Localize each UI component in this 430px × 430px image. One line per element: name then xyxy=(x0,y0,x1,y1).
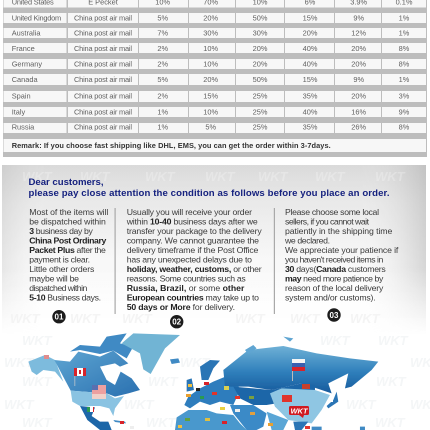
row: United States xyxy=(12,0,413,6)
row: Australia: 30% xyxy=(203,28,219,38)
WKT logo pin: WKT xyxy=(290,406,309,415)
text column 2 xyxy=(126,207,262,312)
Caribbean xyxy=(113,420,126,423)
text column 3: sellers, if you cannot wait xyxy=(285,216,370,226)
panel watermarks: WKT xyxy=(70,311,101,326)
text column 2: has any unexpected delays due to xyxy=(127,254,252,264)
text column 2: Russia, Brazil, or some other xyxy=(127,283,245,293)
row: Germany: 8% xyxy=(399,60,410,68)
row: Australia xyxy=(12,28,410,38)
row: Canada: 5% xyxy=(157,75,168,84)
row: Germany: China post air mail xyxy=(74,60,132,68)
text column 3: we declared. xyxy=(284,236,330,246)
row: Italy xyxy=(12,108,410,116)
badge 03: 03 xyxy=(330,311,339,320)
map watermarks: WKT xyxy=(124,397,155,412)
Greenland xyxy=(122,333,180,374)
panel watermarks: WKT xyxy=(375,169,406,184)
row: France: 20% xyxy=(351,44,367,53)
row: Australia: Australia xyxy=(12,28,41,38)
row: Spain: 25% xyxy=(253,92,268,100)
divider xyxy=(114,208,116,314)
map watermarks: WKT xyxy=(375,415,406,430)
map watermarks: WKT xyxy=(146,415,177,430)
text column 1: be dispatched within xyxy=(29,216,106,226)
panel watermarks xyxy=(10,169,406,326)
row: Canada: 15% xyxy=(303,75,318,84)
text column 1: China Post Ordinary xyxy=(29,236,106,246)
row: Australia: 7% xyxy=(157,28,168,38)
Middle East xyxy=(230,405,267,430)
text column 2: within 10-40 business days after we xyxy=(126,216,258,226)
row: Australia: 20% xyxy=(303,28,318,38)
Mexico and Central America xyxy=(80,406,112,430)
row: Russia: 8% xyxy=(399,122,410,132)
badge 03 xyxy=(327,308,341,322)
Alaska xyxy=(28,355,63,382)
text column 1 xyxy=(29,207,108,302)
panel watermarks: WKT xyxy=(10,311,41,326)
row: Italy: 1% xyxy=(157,108,168,116)
flag: Mexico xyxy=(87,407,94,412)
badge 01 xyxy=(52,310,66,323)
text column 3: may need more patience by xyxy=(285,274,384,284)
Scandinavia xyxy=(200,360,220,380)
heading xyxy=(28,177,390,199)
row: Canada: Canada xyxy=(12,75,38,84)
Central Asia and Mongolia xyxy=(233,383,315,405)
panel: customer notice xyxy=(2,165,426,340)
row: Canada: China post air mail xyxy=(74,75,132,84)
text column 3: Please choose some local xyxy=(285,207,379,217)
China xyxy=(270,388,330,423)
text column 2: transfer your package to the delivery xyxy=(127,226,262,236)
heading: please pay close attention the condition as follows before you place an order. xyxy=(28,188,390,199)
row: France: 40% xyxy=(303,44,318,53)
row: Russia: Russia xyxy=(12,122,35,132)
text column 2: European countries may take up to xyxy=(127,292,259,302)
row: France: China post air mail xyxy=(74,44,132,53)
text column 1: 3 business day by xyxy=(29,226,93,236)
row: France: 8% xyxy=(399,44,410,53)
map watermarks: WKT xyxy=(180,355,211,370)
map watermarks: WKT xyxy=(346,397,377,412)
continents xyxy=(28,333,378,430)
row: Germany xyxy=(12,60,410,68)
row: Italy: 25% xyxy=(253,108,268,116)
row: Italy: China post air mail xyxy=(74,108,132,116)
badge 02 xyxy=(170,315,183,328)
text column 1: 5-10 Business days. xyxy=(29,292,101,302)
row: Spain: 3% xyxy=(399,92,410,100)
map watermarks: WKT xyxy=(148,374,179,389)
text column 1: Little other orders xyxy=(29,264,95,274)
table row cells xyxy=(4,0,426,152)
text column 1: dispatched within xyxy=(29,283,87,293)
map watermarks: WKT xyxy=(378,333,409,348)
shipping table xyxy=(3,0,427,157)
map watermarks: WKT xyxy=(376,374,407,389)
row: United Kingdom: 9% xyxy=(353,14,364,22)
row: Italy: 10% xyxy=(203,108,219,116)
text column 2: holiday, weather, customs, or other xyxy=(127,264,262,274)
panel watermarks: WKT xyxy=(235,311,266,326)
map watermarks xyxy=(4,333,430,430)
Arctic archipelago xyxy=(245,337,293,354)
panel watermarks: WKT xyxy=(205,169,236,184)
row: United Kingdom: 1% xyxy=(399,14,410,22)
row: Spain: Spain xyxy=(12,92,31,100)
text column 1: Packet Plus after the xyxy=(29,245,106,255)
row: Russia: 1% xyxy=(157,122,168,132)
row: Italy: 9% xyxy=(399,108,410,116)
Philippines and Indonesia xyxy=(312,427,365,430)
text column 3: system and/or customs). xyxy=(285,292,376,302)
row: Spain: 35% xyxy=(303,92,318,100)
row: Russia: 35% xyxy=(303,122,318,132)
world map xyxy=(4,333,430,430)
Canada xyxy=(54,351,140,397)
row: Italy: Italy xyxy=(12,108,26,116)
Africa xyxy=(175,410,247,430)
row: Germany: 20% xyxy=(351,60,367,68)
row: Italy: 40% xyxy=(303,108,318,116)
Japan xyxy=(327,392,338,408)
small flags xyxy=(120,382,333,429)
flag: Alaska USA small xyxy=(44,355,49,359)
text column 1: payment is clear. xyxy=(29,254,90,264)
text column 3: 30 days(Canada customers xyxy=(285,264,386,274)
text column 3: reason of the local delivery xyxy=(285,283,384,293)
text column 2: company. We cannot guarantee the xyxy=(127,236,259,246)
panel watermarks: WKT xyxy=(80,169,111,184)
map watermarks: WKT xyxy=(22,374,53,389)
panel watermarks: WKT xyxy=(22,169,53,184)
row: Australia: China post air mail xyxy=(74,28,132,38)
row: France: 10% xyxy=(203,44,219,53)
row: Russia: China post air mail xyxy=(74,122,132,132)
panel watermarks: WKT xyxy=(145,169,176,184)
row: United Kingdom: China post air mail xyxy=(74,14,132,22)
row: Germany: 40% xyxy=(303,60,318,68)
flag: Russia xyxy=(292,359,305,381)
row: United Kingdom: 50% xyxy=(253,14,268,22)
row: Spain: 20% xyxy=(351,92,367,100)
panel watermarks: WKT xyxy=(315,169,346,184)
row: Germany: Germany xyxy=(12,60,42,68)
row: Germany: 20% xyxy=(253,60,268,68)
row: United Kingdom: 20% xyxy=(203,14,219,22)
flag: Canada xyxy=(74,368,86,386)
map watermarks: WKT xyxy=(320,333,351,348)
row: France: 20% xyxy=(253,44,268,53)
text column 3: patiently in the shipping time xyxy=(285,226,392,236)
panel watermarks: WKT xyxy=(290,311,321,326)
Europe xyxy=(184,373,240,408)
row: Russia: 25% xyxy=(253,122,268,132)
text column 2: Usually you will receive your order xyxy=(127,207,252,217)
row: United Kingdom: United Kingdom xyxy=(12,14,61,22)
Iceland xyxy=(170,358,180,364)
divider xyxy=(274,208,275,314)
badge 02: 02 xyxy=(172,318,182,327)
panel watermarks: WKT xyxy=(258,169,289,184)
SE Asia xyxy=(293,422,308,430)
flag: Mongolia xyxy=(302,384,310,389)
text column 2: delivery timeframe if the Post Office xyxy=(127,245,259,255)
text column 3: We appreciate your patience if xyxy=(285,245,399,255)
panel watermarks: WKT xyxy=(122,311,153,326)
row: Spain: 2% xyxy=(157,92,168,100)
row: Germany: 10% xyxy=(203,60,219,68)
map watermarks: WKT xyxy=(22,333,53,348)
text column 3 xyxy=(284,207,399,302)
row: United Kingdom: 5% xyxy=(157,14,168,22)
remark: Remark: If you choose fast shipping like DHL, EMS, you can get the order within 3-7days. xyxy=(12,141,331,150)
row: United Kingdom: 15% xyxy=(303,14,318,22)
row: Canada xyxy=(12,75,410,84)
flag: China xyxy=(282,395,292,402)
row: Australia: 30% xyxy=(253,28,268,38)
row: Russia xyxy=(12,122,410,132)
flag: USA xyxy=(92,385,106,399)
badge 01: 01 xyxy=(55,313,64,322)
WKT logo pin xyxy=(289,406,309,418)
row: Russia: 5% xyxy=(205,122,216,132)
row: Canada: 1% xyxy=(399,75,410,84)
row: Canada: 50% xyxy=(253,75,268,84)
map watermarks: WKT xyxy=(22,415,53,430)
row: Spain: China post air mail xyxy=(74,92,132,100)
row: Australia: 1% xyxy=(399,28,410,38)
text column 3: you haven't received items in xyxy=(285,254,383,264)
text column 1: maybe will be xyxy=(29,274,79,284)
row: Spain xyxy=(12,92,410,100)
row: Italy: 16% xyxy=(351,108,367,116)
heading: Dear customers, xyxy=(28,177,104,188)
map watermarks: WKT xyxy=(4,397,35,412)
text column 1: Most of the items will xyxy=(29,207,108,217)
map watermarks: WKT xyxy=(4,355,35,370)
row: France: 2% xyxy=(157,44,168,53)
Arctic islands xyxy=(70,333,133,358)
text column 2: reasons. Some countries such as xyxy=(127,274,246,284)
USA xyxy=(71,391,124,416)
row: Spain: 15% xyxy=(203,92,219,100)
India xyxy=(267,412,288,430)
text column 2: 50 days or More for delivery. xyxy=(127,302,235,312)
UK xyxy=(187,378,194,392)
row: Canada: 9% xyxy=(353,75,364,84)
Russia xyxy=(223,346,378,393)
row: Germany: 2% xyxy=(157,60,168,68)
row: Russia: 26% xyxy=(351,122,367,132)
row: Canada: 20% xyxy=(203,75,219,84)
row: United Kingdom xyxy=(12,14,410,22)
row: France xyxy=(12,44,410,53)
row: Australia: 12% xyxy=(351,28,367,38)
panel watermarks: WKT xyxy=(350,311,381,326)
row: France: France xyxy=(12,44,35,53)
